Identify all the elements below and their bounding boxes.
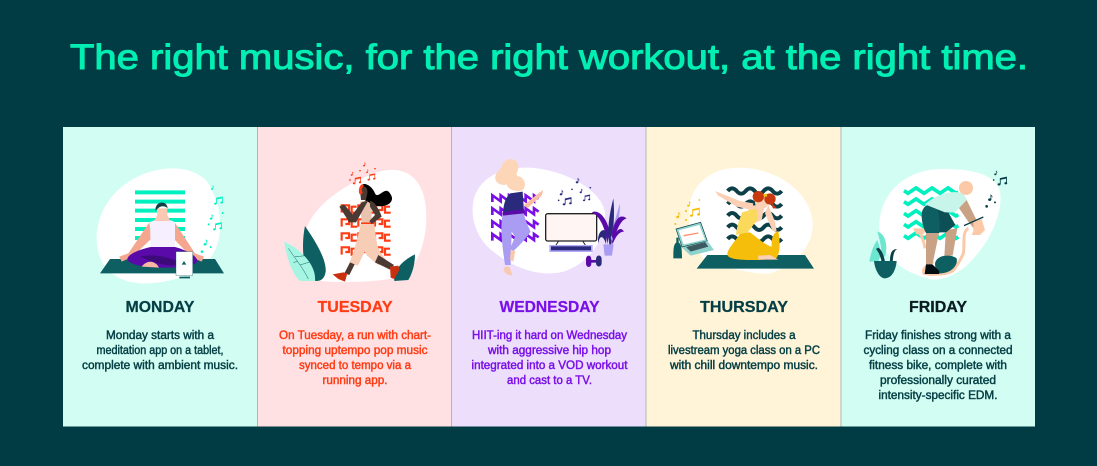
text: Tuesday description: running app.: [322, 375, 388, 387]
text: Wednesday description: with aggressive hip hop: [487, 345, 611, 357]
text: Monday description: complete with ambient music.: [82, 360, 238, 372]
panel: Wednesday: [452, 127, 646, 426]
text: Friday description: [864, 330, 1012, 402]
text: Thursday description: Thursday includes a: [692, 330, 796, 342]
text: Thursday description: with chill downtempo music.: [669, 360, 818, 372]
panel: Tuesday: [258, 127, 452, 426]
text: Monday description: meditation app on a tablet,: [96, 345, 224, 357]
text: Friday description: intensity-specific EDM.: [878, 390, 998, 402]
text: Tuesday description: synced to tempo via a: [299, 360, 412, 372]
heading: Monday: MONDAY: [126, 299, 195, 316]
text: Wednesday description: and cast to a TV.: [507, 375, 592, 387]
illustration: woman running with headphones: [284, 162, 426, 282]
text: Friday description: Friday finishes strong with a: [865, 330, 1012, 342]
text: Tuesday description: [279, 330, 431, 387]
text: Monday description: [82, 330, 238, 372]
panel: Friday: [841, 127, 1035, 426]
heading: Wednesday: WEDNESDAY: [500, 299, 600, 316]
text: Thursday description: [668, 330, 820, 372]
text: Thursday description: livestream yoga class on a PC: [668, 345, 820, 357]
illustration: man meditating with tablet: [97, 168, 224, 283]
heading: Friday: FRIDAY: [909, 299, 967, 316]
text: Wednesday description: HIIT-ing it hard on Wednesday: [472, 330, 627, 342]
title: The right music, for the right workout, at the right time.: [70, 37, 1028, 77]
illustration: woman dancing beside a TV: [473, 159, 627, 276]
text: Tuesday description: On Tuesday, a run with chart-: [279, 330, 431, 342]
text: Wednesday description: integrated into a VOD workout: [472, 360, 628, 372]
text: Friday description: fitness bike, complete with: [869, 360, 1007, 372]
text: Monday description: Monday starts with a: [106, 330, 215, 342]
text: Friday description: professionally curated: [880, 375, 996, 387]
text: Tuesday description: topping uptempo pop music: [282, 345, 428, 357]
illustration: woman in yoga pose with laptop: [673, 168, 814, 274]
panel: Monday: [63, 127, 258, 426]
text: Friday description: cycling class on a connected: [864, 345, 1012, 357]
heading: Thursday: THURSDAY: [700, 299, 788, 316]
panel: Thursday: [646, 127, 841, 426]
heading: Tuesday: TUESDAY: [318, 299, 393, 316]
illustration: man on a fitness bike: [869, 169, 1007, 280]
text: Wednesday description: [472, 330, 628, 387]
